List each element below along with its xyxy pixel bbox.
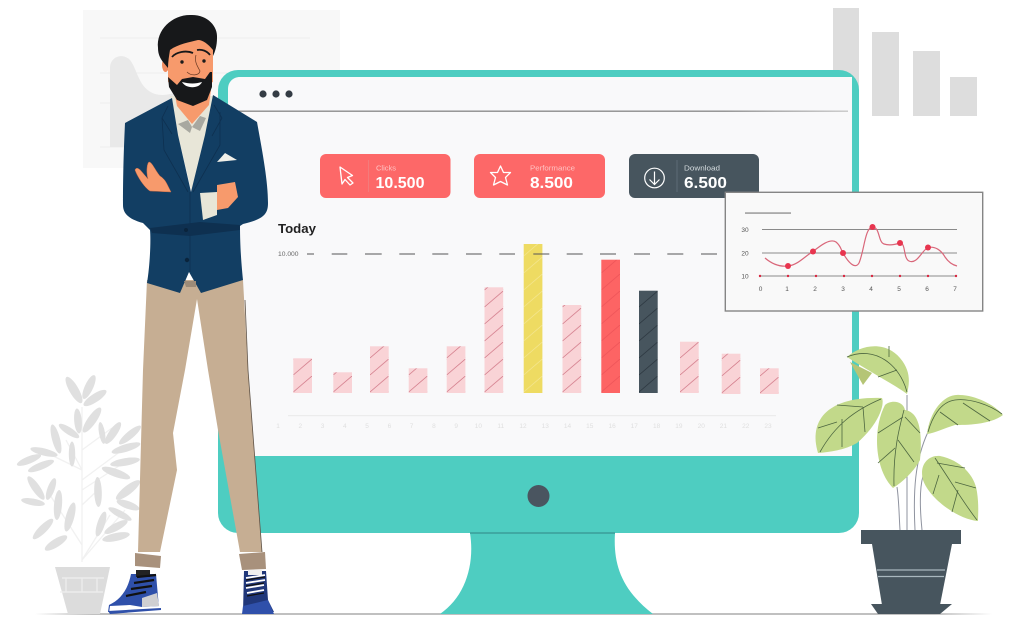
beard — [168, 72, 212, 106]
chart x axis labels — [276, 423, 772, 430]
chart x axis labels: 22 — [742, 423, 750, 430]
stat card: download — [629, 154, 759, 198]
monitor stand — [440, 533, 653, 614]
background bar chart: grey bars — [833, 8, 977, 116]
bar 13 — [760, 368, 779, 394]
chart x axis labels: 3 — [321, 423, 325, 430]
chart x axis labels: 4 — [343, 423, 347, 430]
belt — [184, 281, 196, 287]
trouser cuffs — [135, 552, 266, 570]
x axis labels: 2 — [813, 286, 817, 293]
chart x axis labels: 5 — [365, 423, 369, 430]
monitor — [218, 70, 859, 534]
bar 4 — [409, 368, 427, 393]
icon: download arrow — [645, 168, 664, 188]
stat card: download: Download — [684, 164, 720, 172]
chart x axis labels: 14 — [564, 423, 571, 430]
bar 7 highlighted yellow — [524, 244, 542, 393]
stat card: performance: 8.500 — [530, 175, 573, 192]
chart x axis labels: 2 — [298, 423, 302, 430]
chart x axis labels: 20 — [698, 423, 705, 430]
x axis labels: 4 — [869, 286, 873, 293]
x axis labels: 7 — [953, 286, 957, 293]
y axis labels: 30 — [741, 227, 749, 234]
leaves — [816, 346, 1003, 521]
stat card: clicks — [320, 154, 450, 198]
chart x axis labels: 9 — [454, 423, 458, 430]
potted plant — [816, 346, 1003, 614]
icon: star — [490, 166, 510, 185]
chart x axis labels: 16 — [608, 423, 616, 430]
chart x axis labels: 13 — [542, 423, 549, 430]
right sneaker — [242, 570, 274, 614]
y axis labels: 10 — [741, 274, 749, 280]
baseline points — [759, 275, 957, 277]
stat card: download: 6.500 — [684, 175, 727, 192]
jacket buttons — [184, 228, 189, 262]
chart x axis labels: 19 — [675, 423, 683, 430]
stat card: performance — [474, 154, 605, 198]
person — [108, 15, 274, 614]
heading: today: Today — [278, 221, 317, 236]
left sneaker — [108, 570, 161, 614]
bar 2 — [333, 372, 352, 393]
chart x axis labels: 10 — [475, 423, 482, 430]
red curve — [765, 227, 957, 266]
y axis labels: 20 — [741, 250, 749, 258]
chart x axis labels: 12 — [519, 423, 527, 430]
bar 6 — [484, 287, 503, 393]
neck — [174, 90, 211, 124]
chart x axis labels: 1 — [276, 423, 280, 430]
chart x axis labels: 11 — [497, 423, 504, 430]
hair — [158, 15, 217, 68]
data points — [785, 224, 931, 269]
screen — [228, 77, 852, 456]
chart x axis labels: 18 — [653, 423, 661, 430]
shirt collar shadow — [178, 116, 206, 133]
dashed target line — [307, 253, 717, 255]
chart x axis labels: 6 — [388, 423, 392, 430]
stat card: performance: Performance — [530, 164, 575, 172]
stat card: clicks: 10.500 — [376, 175, 425, 192]
bar 11 — [680, 342, 699, 393]
shirt — [170, 96, 214, 194]
x axis labels: 1 — [785, 286, 789, 293]
grid lines — [762, 230, 957, 253]
window header line — [228, 110, 848, 112]
bar 10 highlighted dark — [639, 291, 658, 393]
floor line — [35, 613, 992, 615]
x axis labels: 6 — [925, 286, 929, 293]
left hand — [135, 162, 171, 192]
leaf veins — [818, 346, 1002, 520]
pot — [872, 544, 952, 605]
bar 5 — [447, 346, 465, 393]
right cuff — [200, 192, 217, 220]
power button — [528, 485, 550, 507]
chart x axis labels: 8 — [432, 423, 436, 430]
bar 3 — [370, 346, 389, 393]
bar 1 — [293, 358, 312, 393]
eyebrows — [172, 50, 210, 57]
x axis labels: 0 — [759, 286, 763, 293]
nose — [187, 55, 200, 75]
jacket shading — [150, 222, 240, 236]
eyes — [180, 59, 206, 64]
x axis labels: 5 — [897, 286, 901, 293]
bar 9 highlighted red — [601, 260, 620, 393]
x axis labels: 3 — [841, 286, 845, 293]
right hand — [217, 182, 238, 210]
bar chart — [293, 244, 779, 394]
stat card: clicks: Clicks — [376, 164, 396, 172]
chart x axis labels: 23 — [764, 423, 772, 430]
smile — [182, 82, 202, 87]
chart x axis labels: 7 — [410, 423, 414, 430]
stems — [897, 395, 928, 530]
x axis labels — [759, 286, 957, 293]
icon: cursor — [340, 167, 353, 185]
background panel: faded area chart — [83, 10, 340, 168]
jacket — [123, 95, 268, 293]
chart baseline — [288, 415, 776, 416]
face — [168, 39, 213, 92]
y axis labels — [741, 227, 749, 280]
axis label: 10.000: 10.000 — [278, 251, 299, 258]
trousers — [138, 280, 262, 552]
ghost plant on the left — [16, 373, 143, 614]
window control dots — [259, 90, 293, 98]
chart x axis labels: 17 — [631, 423, 638, 430]
chart x axis labels: 15 — [586, 423, 594, 430]
bar 12 — [722, 354, 740, 394]
bar 8 — [562, 305, 581, 393]
pocket square — [217, 153, 237, 162]
ear — [162, 58, 169, 72]
chart x axis labels: 21 — [720, 423, 727, 430]
overlay card: line chart — [725, 192, 983, 311]
